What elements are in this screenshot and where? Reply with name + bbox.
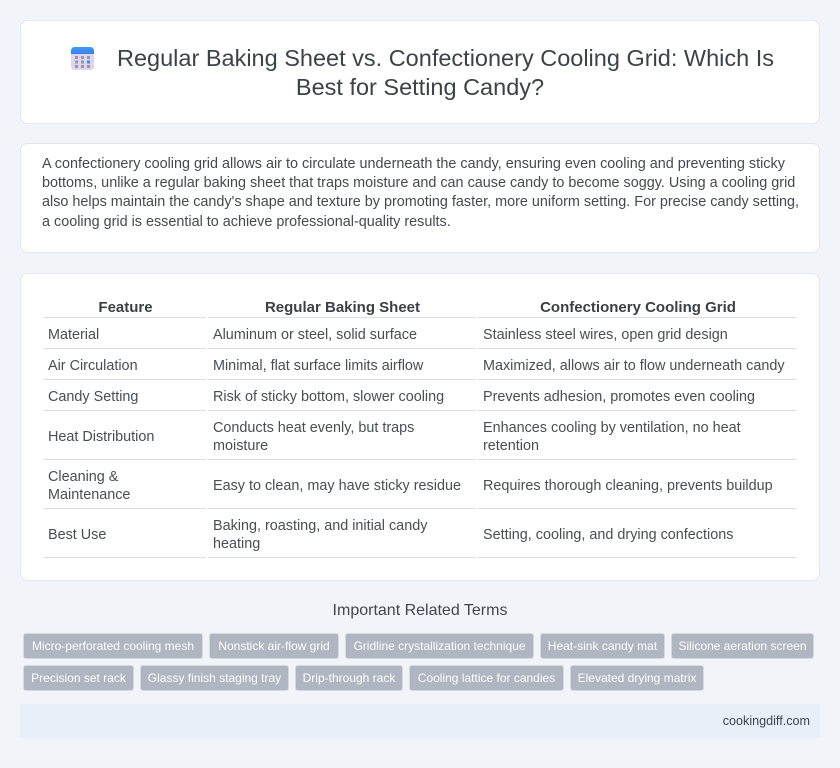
tag <box>409 665 564 691</box>
text block: introduction: A confectionery cooling grid allows air to circulate underneath the candy, ensuring even cooling and preventing sticky <box>42 156 785 172</box>
cell: baking sheet airflow: Minimal, flat surface limits airflow <box>213 358 423 374</box>
cell: baking sheet heat: moisture <box>213 438 268 454</box>
row: Cleaning and Maintenance <box>48 469 130 503</box>
tag <box>140 665 289 691</box>
cell: baking sheet use <box>213 518 428 552</box>
tag <box>23 665 134 691</box>
cell: baking sheet setting: Risk of sticky bottom, slower cooling <box>213 389 444 405</box>
tag <box>570 665 704 691</box>
cell: cooling grid material: Stainless steel wires, open grid design <box>483 327 728 343</box>
cell: baking sheet use: heating <box>213 536 260 552</box>
tag: Elevated drying matrix <box>578 671 696 685</box>
tag: Nonstick air-flow grid <box>218 639 330 653</box>
cell: cooling grid airflow: Maximized, allows air to flow underneath candy <box>483 358 785 374</box>
tags: related terms <box>23 633 814 691</box>
row: Best Use: Best Use <box>48 527 106 543</box>
cell: cooling grid setting: Prevents adhesion, promotes even cooling <box>483 389 755 405</box>
table header: Confectionery Cooling Grid: Confectionery Cooling Grid <box>540 299 736 316</box>
table header: Regular Baking Sheet: Regular Baking Sheet <box>265 299 420 316</box>
title: Best for Setting Candy? <box>296 74 544 100</box>
text block: introduction: a cooling grid is essential to achieve professional-quality results. <box>42 214 451 230</box>
text block: introduction: bottoms, unlike a regular baking sheet that traps moisture and can cause candy to become soggy. Using a cooling grid <box>42 175 795 191</box>
tag <box>23 633 203 659</box>
tag: Precision set rack <box>31 671 126 685</box>
tag: Micro-perforated cooling mesh <box>32 639 194 653</box>
row: Cleaning and Maintenance: Maintenance <box>48 487 130 503</box>
cell: baking sheet heat <box>213 420 414 454</box>
cell: cooling grid heat <box>483 420 741 454</box>
cell: baking sheet use: Baking, roasting, and initial candy <box>213 518 427 534</box>
title <box>117 45 774 100</box>
footer source: cookingdiff.com <box>723 714 810 728</box>
cell: baking sheet heat: Conducts heat evenly, but traps <box>213 420 414 436</box>
tag: Glassy finish staging tray <box>148 671 281 685</box>
panel: title header <box>20 20 820 124</box>
tag: Gridline crystallization technique <box>353 639 526 653</box>
tag <box>209 633 339 659</box>
tag: Cooling lattice for candies <box>418 671 555 685</box>
title: Regular Baking Sheet vs. Confectionery Cooling Grid: Which Is <box>117 45 774 71</box>
row: Material: Material <box>48 327 99 343</box>
heading: related terms: Important Related Terms <box>333 602 507 619</box>
tag <box>671 633 814 659</box>
text block: introduction: also helps maintain the candy's shape and texture by promoting faster, more uniform setting. For precise candy setting, <box>42 194 799 210</box>
cell: cooling grid use: Setting, cooling, and drying confections <box>483 527 733 543</box>
tag <box>295 665 403 691</box>
cell: cooling grid heat: Enhances cooling by ventilation, no heat <box>483 420 741 436</box>
panel: introduction <box>20 143 820 253</box>
tag: Heat-sink candy mat <box>548 639 657 653</box>
row: Candy Setting: Candy Setting <box>48 389 138 405</box>
cell: baking sheet material: Aluminum or steel, solid surface <box>213 327 417 343</box>
cell: baking sheet cleaning: Easy to clean, may have sticky residue <box>213 478 461 494</box>
cell: cooling grid cleaning: Requires thorough cleaning, prevents buildup <box>483 478 773 494</box>
tag: Drip-through rack <box>303 671 395 685</box>
row: Cleaning and Maintenance: Cleaning & <box>48 469 118 485</box>
tag <box>540 633 665 659</box>
text block: introduction <box>42 156 799 230</box>
row: Air Circulation: Air Circulation <box>48 358 138 374</box>
row: Heat Distribution: Heat Distribution <box>48 429 154 445</box>
icon: calendar grid <box>71 47 94 70</box>
panel: comparison table <box>20 273 820 581</box>
tag <box>345 633 534 659</box>
tag: Silicone aeration screen <box>678 639 807 653</box>
table header: Feature: Feature <box>98 299 153 316</box>
cell: cooling grid heat: retention <box>483 438 539 454</box>
footer bar <box>20 704 820 738</box>
